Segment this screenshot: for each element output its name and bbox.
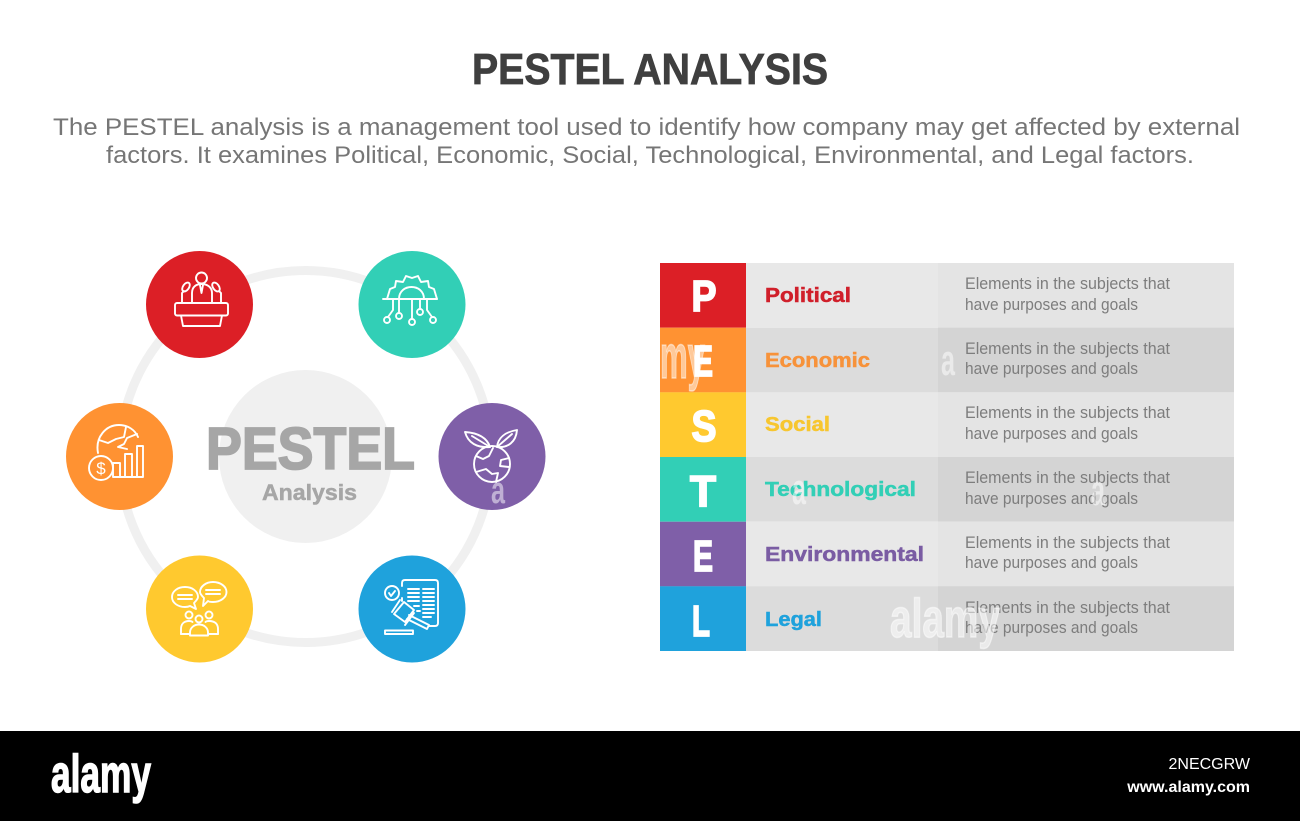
row: Environmental: Environmental (765, 543, 924, 566)
watermark fragments: a (792, 465, 806, 514)
row: Political: Elements in the subjects that (965, 275, 1170, 293)
icon: political speaker at podium (146, 251, 253, 358)
website: www.alamy.com (1126, 779, 1250, 796)
row: Political: have purposes and goals (965, 296, 1138, 314)
row: Social: have purposes and goals (965, 425, 1138, 443)
row: Political: P (692, 272, 716, 321)
row: Technological: Elements in the subjects that (965, 469, 1170, 487)
icon: economic globe with coin and bars: $ (96, 459, 106, 478)
row: Economic: Elements in the subjects that (965, 340, 1170, 358)
row: Environmental (660, 522, 1234, 586)
title: PESTEL ANALYSIS (472, 45, 828, 94)
row: Legal: have purposes and goals (965, 619, 1138, 637)
row: Economic: E (693, 337, 713, 386)
watermark fragments (491, 323, 1105, 649)
row: Technological (660, 457, 1234, 522)
icon: environment globe with leaves (438, 403, 546, 510)
watermark fragments: alamy (890, 587, 1000, 649)
watermark fragments: a (491, 470, 506, 512)
row: Legal: Elements in the subjects that (965, 599, 1170, 617)
row: Environmental: Elements in the subjects that (965, 534, 1170, 552)
intro text block: factors. It examines Political, Economic, Social, Technological, Environmental, and Legal factors. (106, 142, 1194, 169)
footer logo: alamy (51, 745, 151, 804)
row: Social: Social (765, 413, 830, 436)
panel: PESTEL wheel diagram (66, 251, 546, 662)
row: Political: Political (765, 284, 851, 307)
row: Economic (660, 328, 1234, 392)
row: Environmental: have purposes and goals (965, 554, 1138, 572)
row: Political (660, 263, 1234, 328)
row: Social: Elements in the subjects that (965, 404, 1170, 422)
icon: economic globe with coin and bars (66, 403, 173, 510)
icon: social people with speech bubbles (146, 556, 253, 662)
row: Technological: Technological (765, 478, 916, 501)
icon: technology gear circuit (358, 251, 466, 358)
watermark fragments: my (660, 323, 705, 392)
intro text block: The PESTEL analysis is a management tool used to identify how company may get affected by external (53, 114, 1240, 141)
icon: legal document and gavel (358, 556, 466, 662)
row: Legal: Legal (765, 608, 822, 631)
panel: PESTEL table (660, 263, 1234, 651)
row: Social (660, 392, 1234, 457)
intro text block (53, 114, 1240, 169)
row: Technological: have purposes and goals (965, 490, 1138, 508)
row: Social: S (692, 402, 716, 451)
row: Economic: have purposes and goals (965, 360, 1138, 378)
watermark fragments: a (941, 336, 955, 385)
outer ring (120, 270, 492, 642)
image id: 2NECGRW (1168, 756, 1251, 773)
row: Environmental: E (693, 532, 713, 581)
row: Economic: Economic (765, 349, 870, 372)
centre disc label: Analysis (262, 480, 357, 505)
row: Technological: T (690, 467, 716, 516)
centre disc label: PESTEL (206, 416, 415, 482)
centre disc label (206, 370, 415, 543)
row: Legal (660, 586, 1234, 651)
watermark fragments: a (1091, 466, 1105, 515)
row: Legal: L (692, 597, 710, 646)
footer bar (0, 731, 1300, 821)
